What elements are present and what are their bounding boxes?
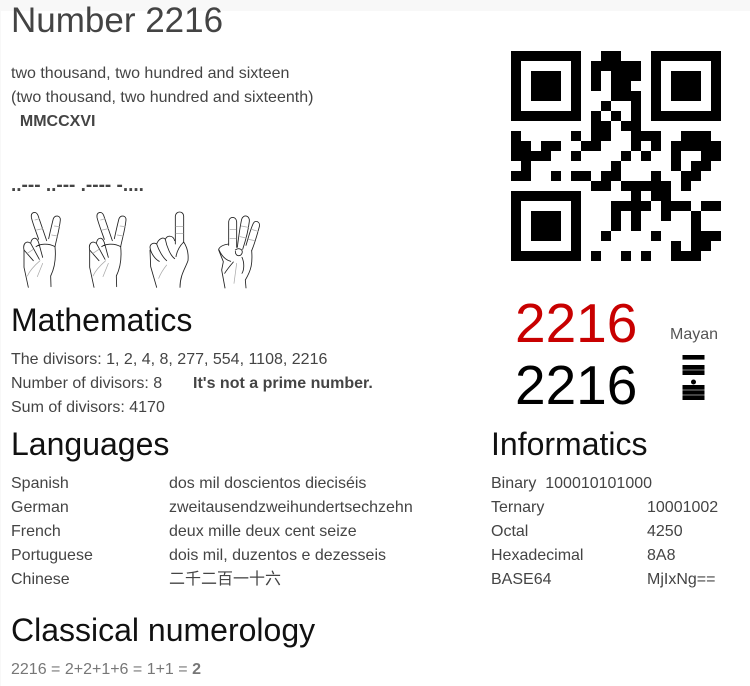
QR code <box>511 51 721 261</box>
hand: one <box>150 212 188 287</box>
language table: German <box>11 499 69 516</box>
hand: two <box>89 212 126 287</box>
hand: three <box>219 216 260 288</box>
language table: dois mil, duzentos e dezesseis <box>169 547 386 564</box>
morse code: ..--- ..--- .---- -.... <box>11 175 144 196</box>
informatics table: Ternary <box>491 499 544 516</box>
big number black: 2216 <box>515 354 637 416</box>
language table: deux mille deux cent seize <box>169 523 357 540</box>
Mayan label: Mayan <box>670 326 718 343</box>
heading: Classical numerology: Classical numerology <box>11 612 315 648</box>
language table: Spanish <box>11 475 69 492</box>
informatics table <box>491 475 718 588</box>
hand: two <box>24 212 60 287</box>
informatics table: Octal <box>491 523 528 540</box>
informatics table: 8A8 <box>647 547 675 564</box>
divisors text: It's not a prime number. <box>193 375 373 392</box>
divisors text <box>11 351 373 416</box>
informatics table: 10001002 <box>647 499 718 516</box>
language table: Portuguese <box>11 547 93 564</box>
language table: French <box>11 523 61 540</box>
number in words: MMCCXVI <box>20 113 95 130</box>
big number red: 2216 <box>515 292 637 354</box>
language table <box>11 475 413 588</box>
language table: dos mil doscientos dieciséis <box>169 475 366 492</box>
top band <box>0 0 750 11</box>
icon: sign language hands <box>23 212 260 288</box>
icon: Mayan numeral <box>682 355 704 400</box>
heading: Languages: Languages <box>11 426 169 462</box>
informatics table: MjIxNg== <box>647 571 715 588</box>
divisors text: Sum of divisors: 4170 <box>11 399 165 416</box>
number in words: two thousand, two hundred and sixteen <box>11 65 289 82</box>
divisors text: The divisors: 1, 2, 4, 8, 277, 554, 1108, 2216 <box>11 351 327 368</box>
heading: Informatics: Informatics <box>491 426 647 462</box>
informatics table: 4250 <box>647 523 683 540</box>
informatics table: Binary 100010101000 <box>491 475 652 492</box>
informatics table: BASE64 <box>491 571 551 588</box>
informatics table: Hexadecimal <box>491 547 583 564</box>
numerology sum: 2216 = 2+2+1+6 = 1+1 = 2 <box>11 661 201 678</box>
divisors text: Number of divisors: 8 <box>11 375 162 392</box>
number in words <box>11 65 313 130</box>
language table: 二千二百一十六 <box>169 571 281 588</box>
title: Number 2216 <box>11 1 223 40</box>
language table: zweitausendzweihundertsechzehn <box>169 499 413 516</box>
language table: Chinese <box>11 571 70 588</box>
left edge strip <box>0 0 1 686</box>
number in words: (two thousand, two hundred and sixteenth) <box>11 89 313 106</box>
heading: Mathematics: Mathematics <box>11 302 192 338</box>
